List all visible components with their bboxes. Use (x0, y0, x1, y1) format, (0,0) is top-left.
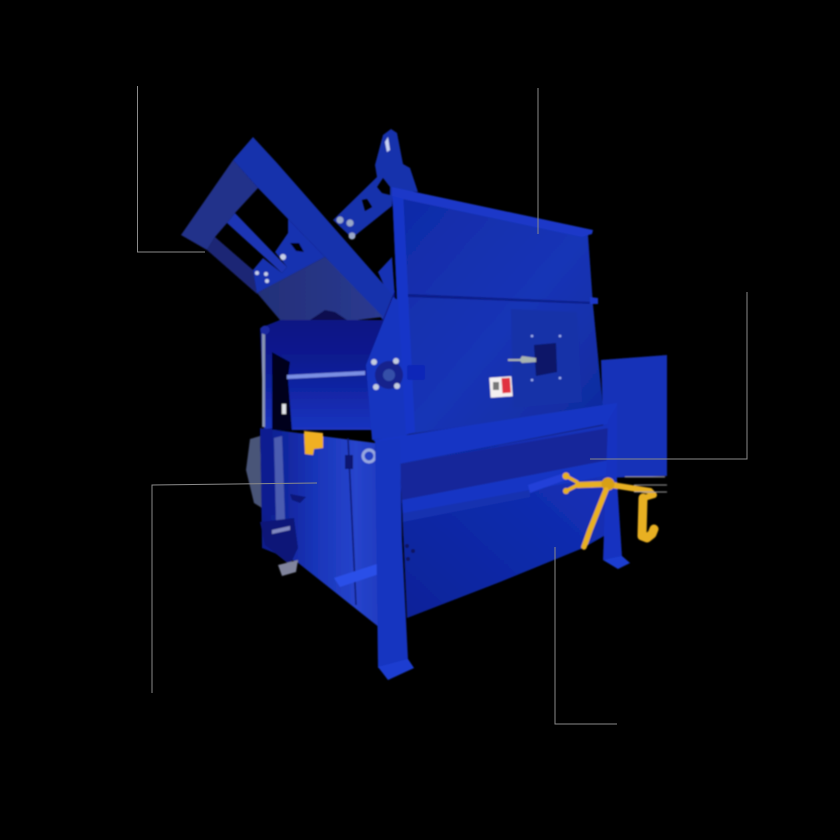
callout line: left (152, 483, 317, 693)
dark interior (272, 352, 292, 430)
chain slots (625, 477, 667, 492)
machine (181, 129, 667, 680)
callout line: top centre (537, 88, 539, 234)
callout line: bottom (555, 547, 617, 724)
door latch (345, 455, 353, 469)
lower grey plate (257, 257, 383, 322)
callout line: top left (138, 86, 205, 252)
grey post (262, 332, 265, 427)
cross bar (227, 213, 287, 273)
frame left dark face (181, 160, 258, 250)
left edge post (392, 188, 415, 436)
lever bracket (528, 473, 565, 493)
callout line: right (590, 292, 747, 459)
lower right body (400, 424, 611, 618)
inner hopper (260, 290, 400, 430)
access door plate (511, 309, 582, 408)
valve (508, 356, 536, 363)
main diagonal bar (233, 137, 393, 320)
side motor guard (246, 436, 262, 508)
rear lifting arm bracket (333, 129, 418, 298)
pivot plate (366, 297, 425, 440)
inner gusset (253, 219, 325, 293)
handle (290, 494, 306, 503)
warning label (489, 376, 513, 398)
door ring (363, 450, 375, 462)
lower beam (373, 403, 617, 464)
chain binder gold (562, 472, 654, 547)
bottom handle bar (334, 564, 379, 587)
lower latch bracket (260, 518, 298, 565)
middle flange (408, 294, 593, 304)
lower left frame face (207, 237, 258, 294)
top flange (392, 187, 593, 237)
small triangular brace (378, 257, 395, 298)
door gap line (348, 438, 356, 605)
yellow warning label (304, 431, 323, 455)
rear post and foot (603, 405, 630, 569)
hydraulic cylinder (260, 428, 276, 515)
right side door (601, 355, 667, 478)
tilted loading frame (181, 137, 393, 322)
horizontal light bar (287, 371, 365, 379)
upper hopper panel (392, 187, 603, 436)
front post and foot (375, 438, 414, 680)
left end door face (260, 428, 380, 628)
